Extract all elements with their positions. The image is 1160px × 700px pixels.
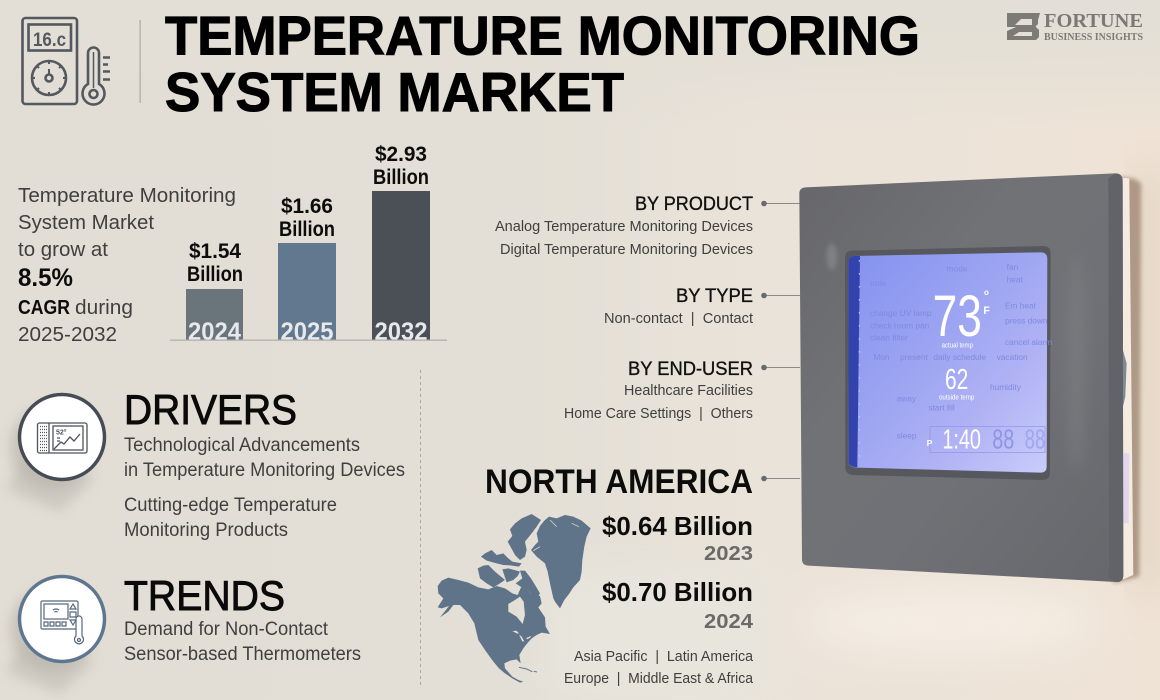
- icon: thermostat and thermometer: [22, 18, 110, 105]
- bar 2024: Billion: [187, 263, 243, 286]
- segment: by product: Analog Temperature Monitoring Devices: [495, 218, 753, 235]
- bar 2032: Billion: [373, 166, 429, 189]
- screen: cancel alarm: [1005, 337, 1052, 347]
- heading: drivers: DRIVERS: [124, 386, 297, 433]
- screen: 88: [992, 423, 1014, 454]
- text block: market growth CAGR: Temperature Monitoring: [18, 185, 236, 207]
- screen: 1:40: [942, 423, 981, 454]
- screen: outside temp: [939, 392, 974, 401]
- region: North America: NORTH AMERICA: [485, 463, 753, 501]
- screen: check room pan: [870, 320, 930, 330]
- connector lines: [761, 201, 800, 481]
- screen: press down: [1005, 315, 1048, 325]
- segment: by type: [604, 286, 754, 327]
- device body: [799, 173, 1123, 582]
- text block: drivers list: Technological Advancements: [124, 435, 360, 456]
- dashed divider: [420, 370, 422, 685]
- screen: P: [927, 438, 933, 448]
- screen: F: [983, 305, 990, 317]
- text block: market growth CAGR: System Market: [18, 212, 154, 234]
- logo: Fortune Business Insights: [1007, 10, 1143, 43]
- text block: trends list: [124, 619, 361, 665]
- text block: other regions: Europe | Middle East & Africa: [564, 670, 754, 687]
- screen: daily schedule: [933, 352, 986, 362]
- Greenland: [531, 515, 591, 608]
- text block: market growth CAGR: during: [75, 297, 133, 319]
- screen: o: [984, 288, 989, 297]
- screen: start fill: [928, 403, 955, 413]
- screen: humidity: [990, 382, 1022, 392]
- photo: wall thermostat: [799, 173, 1141, 583]
- screen: heat: [1007, 275, 1024, 285]
- screen: [848, 252, 1052, 473]
- screen: present: [900, 352, 928, 362]
- region: North America: 2024: [704, 611, 754, 633]
- segment: by end-user: [564, 359, 753, 422]
- screen: fan: [1007, 262, 1019, 272]
- icon: thermostat and thermometer: 16.c: [33, 30, 66, 51]
- screen: clean filter: [870, 333, 908, 343]
- text block: market growth CAGR: CAGR: [18, 297, 70, 319]
- screen: vacation: [997, 352, 1028, 362]
- bar 2024: 2024: [188, 318, 241, 346]
- text block: market growth CAGR: 8.5%: [18, 264, 73, 292]
- bar 2025: 2025: [280, 318, 334, 346]
- heading: trends: TRENDS: [124, 572, 285, 619]
- text block: drivers list: [124, 435, 405, 541]
- bar 2024: $1.54: [189, 240, 241, 263]
- screen: note: [870, 278, 887, 288]
- screen: 88: [1025, 423, 1045, 454]
- bar 2025: $1.66: [281, 195, 333, 218]
- bar 2032: [372, 143, 430, 346]
- region: North America: 2023: [704, 543, 753, 565]
- screen: change UV lamp: [870, 308, 932, 318]
- segment: by type: BY TYPE: [676, 286, 753, 307]
- bar 2032: 2032: [374, 318, 428, 346]
- Caribbean islands: [519, 667, 537, 672]
- device shadow and mount: [1113, 177, 1141, 583]
- segment: by type: Non-contact | Contact: [604, 310, 754, 327]
- screen bezel: [845, 246, 1051, 480]
- text block: drivers list: Cutting-edge Temperature: [124, 495, 337, 516]
- segment: by end-user: BY END-USER: [628, 359, 753, 380]
- region: North America: $0.70 Billion: [602, 577, 753, 607]
- bar 2025: Billion: [279, 218, 335, 241]
- bar 2032: $2.93: [375, 143, 427, 166]
- text block: drivers list: in Temperature Monitoring Devices: [124, 460, 405, 481]
- Great Lakes: [512, 631, 531, 641]
- icon: trends circle: [6, 576, 104, 694]
- segment: by end-user: Home Care Settings | Others: [564, 405, 753, 422]
- divider beside title icon: [140, 20, 141, 103]
- region: North America: $0.64 Billion: [602, 511, 753, 541]
- text block: trends list: Demand for Non-Contact: [124, 619, 329, 640]
- text block: drivers list: Monitoring Products: [124, 520, 288, 541]
- region: North America: [485, 463, 754, 633]
- North America mainland: [438, 578, 550, 683]
- text block: market growth CAGR: to grow at: [18, 239, 108, 261]
- screen: mode: [947, 264, 968, 274]
- icon: drivers circle: 52°: [56, 428, 67, 436]
- title: TEMPERATURE MONITORING: [165, 4, 920, 66]
- segment: by end-user: Healthcare Facilities: [624, 382, 753, 399]
- screen: Em heat: [1005, 300, 1037, 310]
- segment: by product: BY PRODUCT: [635, 194, 753, 215]
- screen: sleep: [897, 430, 917, 440]
- text block: trends list: Sensor-based Thermometers: [124, 644, 361, 665]
- map: North America: [438, 514, 591, 683]
- Greenland ice wisps: [533, 520, 579, 551]
- screen: away: [897, 394, 917, 404]
- segment: by product: Digital Temperature Monitoring Devices: [500, 241, 753, 258]
- screen: 62: [945, 364, 968, 396]
- logo: Fortune Business Insights: FORTUNE: [1044, 10, 1143, 32]
- screen: Mon: [873, 352, 890, 362]
- title: [165, 4, 920, 123]
- screen: actual temp: [942, 341, 973, 350]
- Arctic islands: [478, 514, 541, 599]
- segment: by product: [495, 194, 753, 258]
- text block: other regions: Asia Pacific | Latin America: [574, 648, 754, 665]
- text block: other regions: [564, 648, 754, 687]
- bar chart: market size: [170, 143, 447, 346]
- title: SYSTEM MARKET: [165, 61, 624, 123]
- text block: market growth CAGR: [18, 185, 236, 346]
- screen: 73: [933, 284, 982, 349]
- logo: Fortune Business Insights: BUSINESS INSIGHTS: [1044, 31, 1143, 43]
- bar 2025: [278, 195, 336, 346]
- bar 2024: [186, 240, 243, 346]
- icon: drivers circle: [6, 394, 104, 512]
- text block: market growth CAGR: 2025-2032: [18, 324, 117, 346]
